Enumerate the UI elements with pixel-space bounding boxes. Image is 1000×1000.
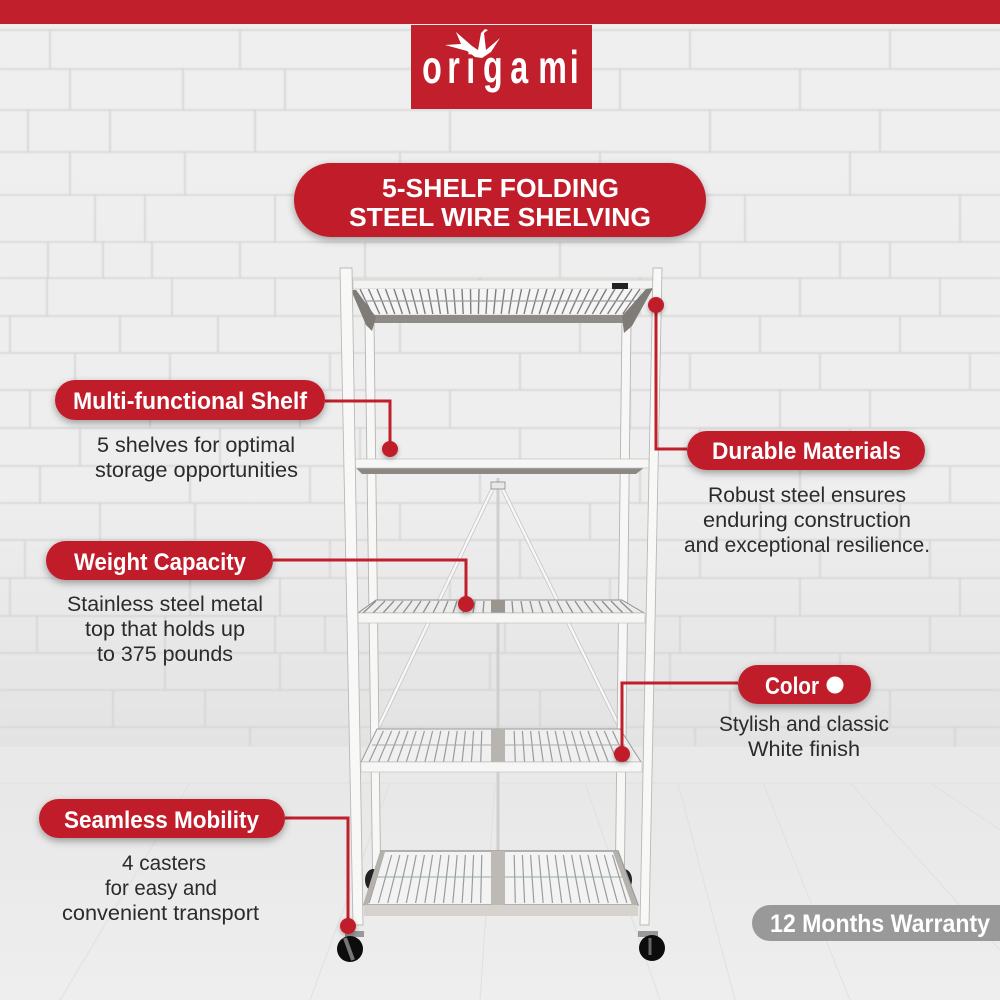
back casters [365, 869, 632, 891]
callout: Seamless Mobility: Seamless Mobility [64, 807, 260, 834]
callout: Weight Capacity [46, 541, 474, 612]
text: Multi-functional Shelf description [95, 434, 298, 482]
text: Seamless Mobility description: 4 casters [122, 852, 206, 875]
text: Seamless Mobility description: for easy and [105, 877, 217, 900]
casters [337, 931, 665, 962]
background: white plank floor [0, 783, 1000, 1000]
product: folding shelf rack [337, 268, 665, 962]
callout: Weight Capacity: Weight Capacity [74, 549, 247, 576]
bottom shelf [363, 851, 638, 916]
text: Color description: White finish [748, 738, 860, 761]
text: Seamless Mobility description: convenient transport [62, 902, 259, 925]
text: Color description: Stylish and classic [719, 713, 889, 736]
outer posts [340, 268, 363, 925]
text: Durable Materials description: enduring construction [703, 509, 911, 532]
top red bar [0, 0, 1000, 24]
text: Durable Materials description: and exceptional resilience. [684, 534, 930, 557]
callout: Multi-functional Shelf: Multi-functional Shelf [73, 388, 308, 415]
text: Durable Materials description: Robust steel ensures [708, 484, 906, 507]
callout: Seamless Mobility [39, 799, 356, 934]
text: Multi-functional Shelf description: storage opportunities [95, 459, 298, 482]
inner posts [365, 322, 381, 905]
callout: Color [614, 665, 871, 762]
title pill: 5-SHELF FOLDING [382, 173, 619, 203]
callout: Color: Color [765, 673, 819, 700]
text: Weight Capacity description: Stainless steel metal [67, 593, 263, 616]
logo: origami: origami [422, 42, 579, 93]
text: Seamless Mobility description [62, 852, 259, 925]
text: Multi-functional Shelf description: 5 shelves for optimal [97, 434, 295, 457]
text: Color description [719, 713, 889, 761]
center post and braces [378, 478, 618, 905]
callout: Durable Materials [648, 297, 925, 470]
second shelf [353, 459, 649, 474]
logo: origami [411, 25, 592, 109]
background: baseboard [0, 747, 1000, 784]
callout: Multi-functional Shelf [55, 380, 398, 457]
background: white brick wall [0, 0, 1000, 747]
icon: paper crane [445, 29, 500, 58]
title pill [294, 163, 706, 237]
title pill: STEEL WIRE SHELVING [349, 202, 651, 232]
text: Weight Capacity description: top that holds up [85, 618, 245, 641]
fourth shelf [361, 729, 642, 772]
callout: Durable Materials: Durable Materials [712, 438, 901, 465]
top shelf [351, 280, 653, 333]
text: Durable Materials description [684, 484, 930, 557]
text: Weight Capacity description [67, 593, 263, 666]
text: Weight Capacity description: to 375 pounds [97, 643, 233, 666]
third shelf [358, 600, 645, 623]
